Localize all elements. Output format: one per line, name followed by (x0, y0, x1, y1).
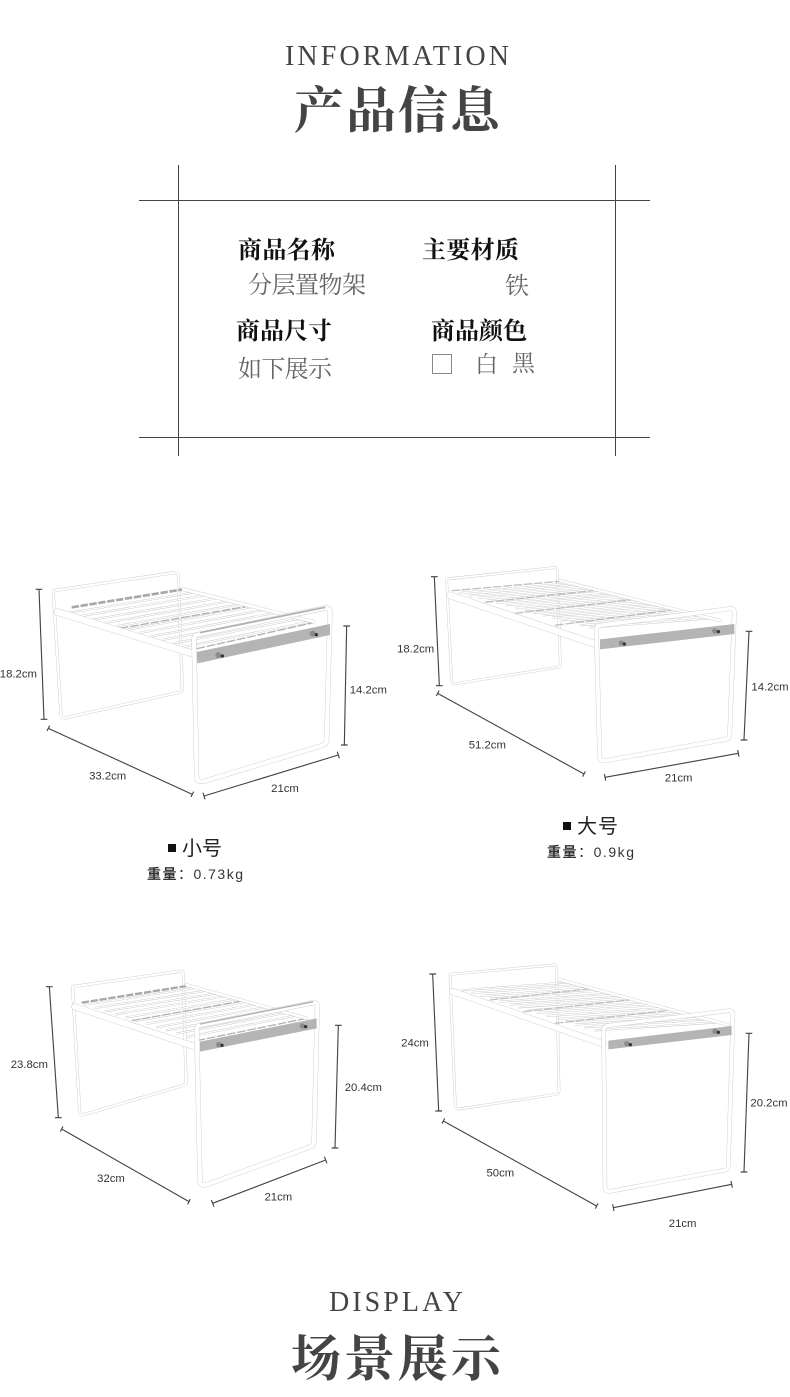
front frame (604, 1011, 733, 1191)
back frame (53, 573, 182, 718)
metal band with bolts (608, 1026, 732, 1049)
heading: INFORMATION 产品信息 (285, 41, 509, 139)
label: small size: 小号 (182, 837, 222, 860)
product size (236, 318, 333, 383)
dimension lines (431, 577, 752, 781)
label: large size: 大号 (577, 815, 618, 838)
product colour (431, 318, 536, 377)
diagram: tall large rack with dimensions (401, 965, 788, 1230)
back frame (447, 568, 560, 684)
product colour: 商品颜色 (431, 318, 527, 345)
product colour: 黑 (512, 351, 536, 376)
dimension labels: 18.2cm (397, 644, 434, 656)
dimension labels: 20.2cm (750, 1098, 788, 1110)
dimension labels: 32cm (97, 1173, 125, 1185)
diagram: tall small rack with dimensions (11, 971, 382, 1207)
label: large size (547, 815, 634, 860)
dimension labels (397, 644, 789, 785)
product colour: 白 (475, 352, 498, 377)
heading: INFORMATION 产品信息: 产品信息 (294, 83, 503, 139)
dimension labels: 20.4cm (345, 1082, 382, 1094)
product name: 分层置物架 (248, 272, 366, 299)
front frame (194, 607, 330, 782)
wire shelf (75, 985, 307, 1047)
dimension labels: 24cm (401, 1038, 429, 1050)
dimension labels: 21cm (271, 783, 299, 795)
label: small size: 重量：0.73kg (147, 866, 243, 882)
heading: DISPLAY 场景展示 (291, 1287, 504, 1387)
back frame (73, 971, 186, 1115)
product size: 如下展示 (238, 356, 333, 383)
metal band with bolts (200, 1018, 317, 1052)
dimension lines (46, 987, 342, 1207)
product name: 商品名称 (238, 237, 337, 264)
dimension labels: 33.2cm (89, 771, 126, 783)
label: large size: 重量：0.9kg (547, 844, 634, 860)
dimension labels (401, 1038, 788, 1230)
dimension labels: 23.8cm (11, 1059, 48, 1071)
metal band with bolts (600, 624, 734, 649)
product size: 商品尺寸 (236, 318, 332, 345)
main material: 主要材质 (422, 237, 519, 264)
dimension labels: 21cm (264, 1192, 292, 1204)
dimension labels: 21cm (669, 1218, 697, 1230)
dimension labels: 14.2cm (350, 684, 387, 696)
dimension labels: 18.2cm (0, 669, 37, 681)
dimension lines (429, 974, 752, 1211)
dimension labels: 50cm (486, 1168, 514, 1180)
dimension labels: 51.2cm (469, 740, 506, 752)
heading: DISPLAY 场景展示: DISPLAY (329, 1287, 463, 1318)
diagram: large rack with dimensions (397, 568, 789, 785)
dimension lines (36, 589, 350, 799)
front frame (596, 609, 734, 761)
diagram: small rack with dimensions (0, 573, 387, 799)
label: small size (147, 837, 243, 882)
front frame (197, 1002, 317, 1185)
product name (238, 237, 366, 299)
panel: product information (139, 165, 650, 456)
wire shelf (452, 979, 728, 1044)
heading: INFORMATION 产品信息: INFORMATION (285, 41, 509, 72)
main material (422, 237, 529, 300)
wire shelf (450, 581, 720, 644)
metal band with bolts (197, 624, 330, 663)
main material: 铁 (505, 273, 529, 300)
heading: DISPLAY 场景展示: 场景展示 (291, 1331, 504, 1387)
dimension labels (11, 1059, 382, 1204)
dimension labels: 14.2cm (751, 682, 789, 694)
back frame (450, 965, 559, 1109)
dimension labels (0, 669, 387, 795)
wire shelf (57, 589, 313, 654)
dimension labels: 21cm (665, 773, 693, 785)
